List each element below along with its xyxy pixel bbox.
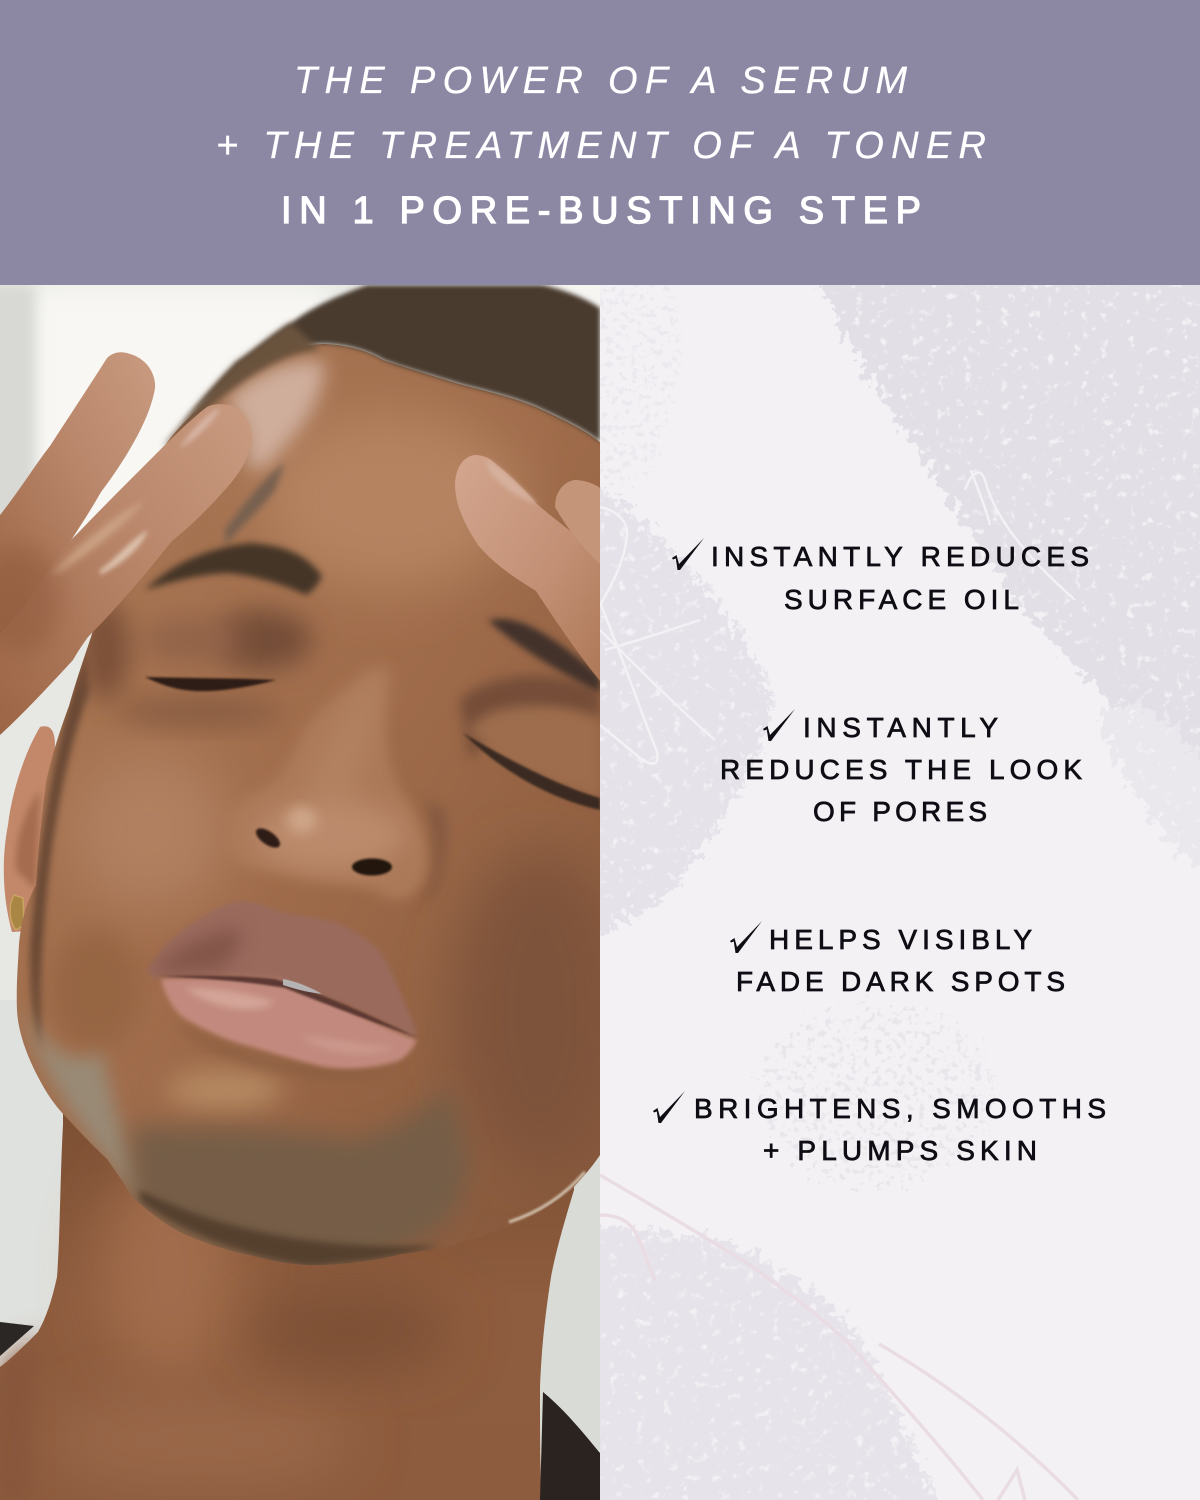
left eyebrow bbox=[145, 543, 322, 595]
benefit: brightens: + PLUMPS SKIN bbox=[763, 1135, 1037, 1166]
right hand fingers bbox=[455, 455, 600, 681]
nose tip pink bbox=[255, 800, 405, 870]
nostril left bbox=[254, 826, 282, 850]
brush smear top right bbox=[814, 265, 1200, 810]
header band bbox=[0, 0, 1200, 285]
icon: check mark bbox=[672, 538, 704, 570]
temple shadow bbox=[225, 462, 285, 545]
benefit: pores: INSTANTLY bbox=[803, 712, 998, 743]
icon: check mark bbox=[763, 709, 795, 741]
icon: check mark bbox=[653, 1091, 685, 1123]
benefit: surface oil: SURFACE OIL bbox=[784, 584, 1019, 615]
shirt collar left bbox=[0, 1322, 34, 1356]
face bbox=[0, 340, 625, 1275]
neck and shoulders bbox=[0, 1100, 574, 1500]
pink scribble lines bbox=[600, 1175, 1078, 1500]
cheek left edge shadow bbox=[30, 652, 90, 1050]
benefit: pores bbox=[720, 709, 1082, 827]
speckle patch centre bbox=[765, 1005, 1005, 1185]
panel: portrait photo bbox=[0, 285, 625, 1500]
right eyelash line bbox=[463, 733, 600, 810]
brush smear left bbox=[585, 480, 772, 940]
nail highlight bbox=[180, 410, 220, 448]
knuckle shadow bbox=[0, 545, 60, 655]
ear bbox=[4, 726, 55, 932]
left eyelid bbox=[140, 618, 240, 662]
icon: check mark bbox=[730, 921, 762, 953]
benefit: brightens bbox=[653, 1091, 1106, 1166]
cheek highlight left bbox=[70, 750, 230, 910]
nose bbox=[225, 668, 446, 905]
left eye socket bbox=[212, 610, 312, 670]
chin light bbox=[167, 1070, 283, 1110]
under-eye shadow bbox=[115, 696, 285, 728]
beard lower edge bbox=[140, 1190, 440, 1266]
left lower cheek tone bbox=[56, 935, 132, 1040]
eye socket right bbox=[460, 676, 600, 760]
benefit: brightens: BRIGHTENS, SMOOTHS bbox=[694, 1093, 1106, 1124]
brush smear top left bbox=[590, 275, 688, 500]
jaw highlight line bbox=[509, 1172, 585, 1222]
left eyelash line bbox=[145, 677, 276, 691]
earring bbox=[10, 895, 24, 930]
photo background bbox=[0, 285, 600, 1500]
white scribble lines bbox=[600, 470, 1075, 764]
hair bbox=[163, 285, 600, 448]
band left of eye bbox=[81, 600, 129, 700]
lips bbox=[147, 901, 418, 1068]
forehead light bbox=[260, 410, 520, 590]
nose right shadow bbox=[426, 804, 448, 894]
fingernail bbox=[485, 458, 538, 504]
finger wet highlight bbox=[50, 500, 145, 575]
brush smear right lower bbox=[1100, 704, 1200, 880]
title: IN 1 PORE-BUSTING STEP bbox=[281, 190, 921, 232]
benefit: pores: REDUCES THE LOOK bbox=[720, 754, 1082, 785]
right eyebrow bbox=[488, 619, 600, 692]
right eyelid bbox=[468, 706, 600, 798]
benefit: dark spots: FADE DARK SPOTS bbox=[736, 966, 1065, 997]
under-lip shadow bbox=[196, 1036, 298, 1072]
panel: benefits background bbox=[585, 265, 1200, 1500]
forehead pale patch bbox=[225, 360, 325, 469]
beard stubble bbox=[130, 1085, 468, 1275]
title: + THE TREATMENT OF A TONER bbox=[216, 125, 986, 167]
title bbox=[216, 60, 986, 232]
mouth line bbox=[160, 975, 418, 1038]
teeth glint bbox=[283, 979, 322, 994]
jaw grey stubble bbox=[24, 1014, 138, 1194]
benefit: dark spots bbox=[730, 921, 1065, 997]
nostril right bbox=[352, 858, 392, 876]
benefit: surface oil: INSTANTLY REDUCES bbox=[711, 541, 1089, 572]
title: THE POWER OF A SERUM bbox=[294, 60, 907, 102]
benefit: pores: OF PORES bbox=[813, 796, 987, 827]
shirt collar right bbox=[540, 1392, 600, 1500]
brush smear bottom left bbox=[585, 1225, 945, 1500]
benefit: surface oil bbox=[672, 538, 1089, 615]
benefit: dark spots: HELPS VISIBLY bbox=[769, 924, 1032, 955]
right cheek shadow bbox=[446, 848, 600, 1158]
left hand fingers bbox=[0, 352, 252, 735]
